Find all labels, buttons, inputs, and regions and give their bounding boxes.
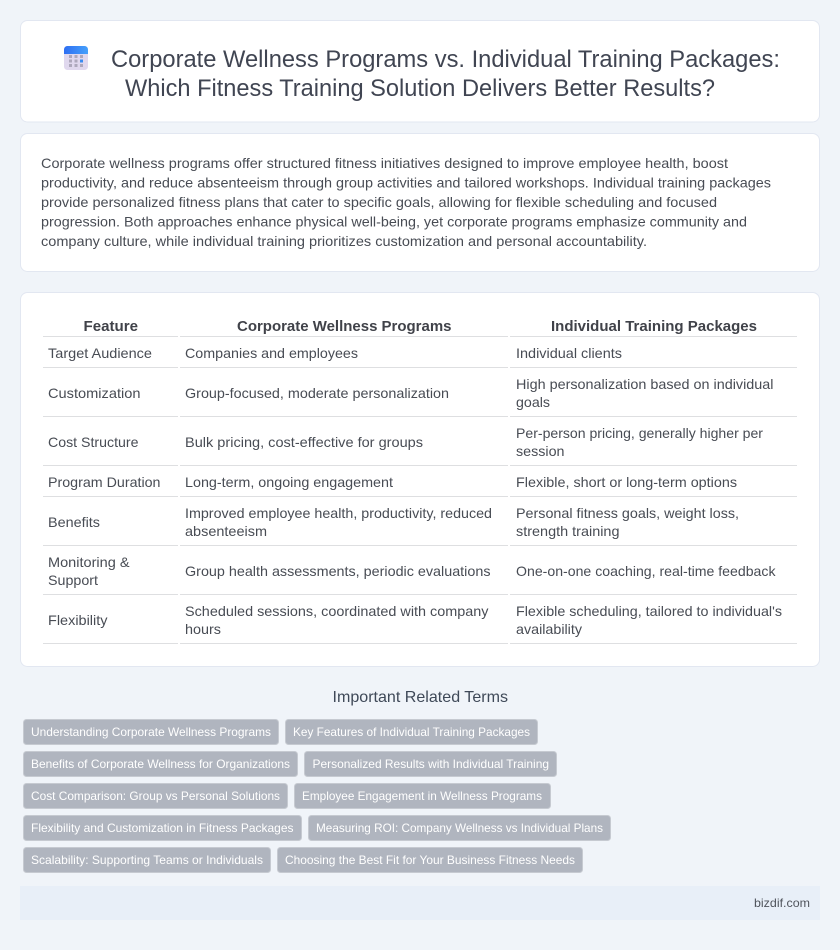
table header [84, 319, 757, 335]
row: program duration: Program Duration [48, 474, 160, 490]
row: customization: High personalization based on individual [516, 376, 774, 392]
intro paragraph [41, 155, 771, 249]
row: flexibility: Flexibility [48, 612, 108, 628]
chip: scalability: Scalability: Supporting Teams or Individuals [31, 853, 263, 867]
row: flexibility: availability [516, 621, 582, 637]
row: target audience [48, 345, 622, 361]
heading: important related terms: Important Related Terms [332, 689, 508, 706]
intro paragraph: Corporate wellness programs offer structured fitness initiatives designed to improve employee health, boost [41, 155, 728, 171]
row: cost structure: Cost Structure [48, 434, 139, 450]
intro paragraph: company culture, while individual training prioritizes customization and personal accountability. [41, 233, 647, 249]
row: cost structure: Per-person pricing, generally higher per [516, 425, 763, 441]
title: Corporate Wellness Programs vs. Individual Training Packages: [111, 46, 780, 73]
row: cost structure [48, 425, 763, 459]
row: target audience: Companies and employees [185, 345, 358, 361]
row: monitoring and support: Support [48, 572, 98, 588]
row: monitoring and support: Monitoring & [48, 554, 130, 570]
intro paragraph: progression. Both approaches enhance physical well-being, yet corporate programs emphasize community and [41, 214, 747, 230]
chip: cost comparison: Cost Comparison: Group vs Personal Solutions [31, 789, 280, 803]
row: benefits: Benefits [48, 514, 100, 530]
row: flexibility: hours [185, 621, 221, 637]
row: benefits: strength training [516, 523, 620, 539]
title: Which Fitness Training Solution Delivers Better Results? [125, 75, 715, 102]
row: flexibility [48, 603, 782, 637]
chip: employee engagement: Employee Engagement in Wellness Programs [302, 789, 542, 803]
footer bar [20, 886, 820, 920]
chip: flexibility and customization: Flexibility and Customization in Fitness Packages [31, 821, 294, 835]
panel: intro summary [20, 134, 820, 272]
row: program duration: Flexible, short or long-term options [516, 474, 737, 490]
row: cost structure: session [516, 443, 564, 459]
table row lines [43, 336, 797, 644]
panel: title card [20, 20, 820, 122]
row: monitoring and support [48, 554, 777, 588]
icon: calendar [64, 46, 88, 70]
row: benefits: Improved employee health, productivity, reduced [185, 505, 492, 521]
chip: key features: Key Features of Individual Training Packages [293, 725, 530, 739]
chip: personalized results: Personalized Results with Individual Training [312, 757, 549, 771]
row: cost structure: Bulk pricing, cost-effective for groups [185, 434, 423, 450]
row: customization: Group-focused, moderate personalization [185, 385, 449, 401]
row: program duration [48, 474, 737, 490]
row: monitoring and support: Group health assessments, periodic evaluations [185, 563, 490, 579]
table header: Corporate Wellness Programs [237, 319, 452, 335]
chip: measuring ROI: Measuring ROI: Company Wellness vs Individual Plans [316, 821, 603, 835]
title [111, 46, 780, 102]
panel: comparison table [20, 292, 820, 666]
row: benefits [48, 505, 739, 539]
row: customization: Customization [48, 385, 140, 401]
table header: Individual Training Packages [551, 319, 757, 335]
row: flexibility: Scheduled sessions, coordinated with company [185, 603, 488, 619]
row: customization: goals [516, 394, 550, 410]
row: benefits: Personal fitness goals, weight loss, [516, 505, 739, 521]
row: benefits: absenteeism [185, 523, 267, 539]
row: flexibility: Flexible scheduling, tailored to individual's [516, 603, 782, 619]
row: target audience: Individual clients [516, 345, 622, 361]
intro paragraph: provide personalized fitness plans that cater to specific goals, allowing for flexible scheduling and focused [41, 194, 717, 210]
table header: Feature [84, 319, 138, 335]
chip: choosing the best fit: Choosing the Best Fit for Your Business Fitness Needs [285, 853, 575, 867]
row: customization [48, 376, 774, 410]
row: target audience: Target Audience [48, 345, 152, 361]
intro paragraph: productivity, and reduce absenteeism through group activities and tailored workshops. Individual training packages [41, 174, 771, 190]
related terms chips [24, 720, 610, 872]
chip: understanding corporate wellness: Understanding Corporate Wellness Programs [31, 725, 271, 739]
row: monitoring and support: One-on-one coaching, real-time feedback [516, 563, 777, 579]
chip: benefits for organizations: Benefits of Corporate Wellness for Organizations [31, 757, 290, 771]
footer source text: bizdif.com [754, 896, 810, 910]
row: program duration: Long-term, ongoing engagement [185, 474, 393, 490]
